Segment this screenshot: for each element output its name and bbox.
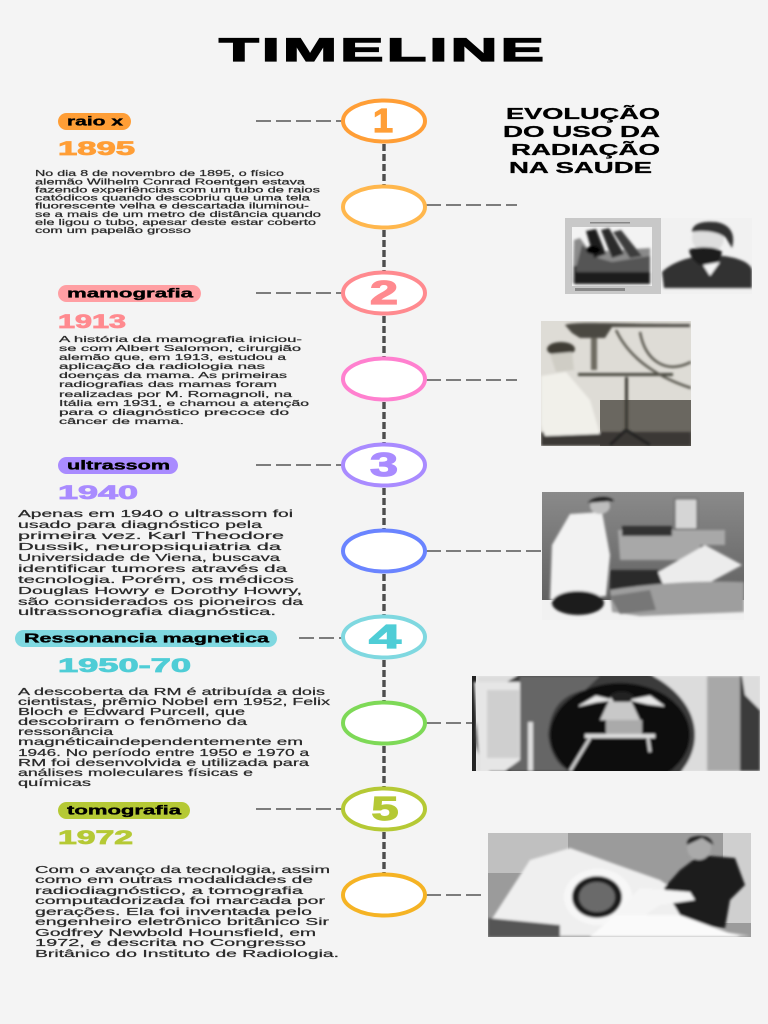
text block 1972: Godfrey Newbold Hounsfield, em <box>35 928 316 939</box>
node 4: 4 <box>369 618 402 655</box>
text block 1940: Douglas Howry e Dorothy Howry, <box>18 586 302 597</box>
text block 1940: Dussik, neuropsiquiatria da <box>18 542 282 553</box>
node 5: 5 <box>372 790 398 827</box>
title: TIMELINE <box>219 32 547 68</box>
text block 1913: doenças da mama. As primeiras <box>59 371 287 380</box>
subtitle: RADIAÇÃO <box>511 139 660 159</box>
text block 1895: se a mais de um metro de distância quando <box>35 210 322 219</box>
node 4 <box>343 616 425 658</box>
text block 1950-70: magnéticaindependentemente em <box>18 737 303 748</box>
node 1: 1 <box>373 102 393 139</box>
photo: early ultrasound <box>542 492 744 620</box>
text block 1950-70: descobriram o fenômeno da <box>18 717 248 728</box>
subtitle: EVOLUÇÃO <box>506 103 660 123</box>
node 1 <box>343 100 425 142</box>
text block 1895: fazendo experiências com um tubo de raios <box>35 186 320 194</box>
pill: ultrassom <box>58 457 178 474</box>
pill: ultrassom: ultrassom <box>67 458 170 472</box>
text block 1950-70: 1946. No período entre 1950 e 1970 a <box>18 748 310 759</box>
text block 1940 <box>18 509 304 618</box>
text block 1950-70: ressonância <box>18 727 114 738</box>
pill: ressonancia magnetica <box>15 630 277 647</box>
text block 1950-70: análises moleculares físicas e <box>18 768 254 779</box>
text block 1950-70: A descoberta da RM é atribuída a dois <box>18 687 325 698</box>
timeline connectors <box>256 121 542 895</box>
year 1940: 1940 <box>58 483 138 504</box>
year 1895: 1895 <box>58 139 136 160</box>
pill: raio x <box>58 113 131 130</box>
photo: early mammography <box>541 321 691 446</box>
node blank 1 <box>343 186 425 228</box>
pill: tomografia <box>58 802 190 819</box>
node blank 2 <box>343 358 425 400</box>
photo: hand x-ray <box>565 218 661 294</box>
text block 1913: A história da mamografia iniciou- <box>59 335 303 344</box>
text block 1895: ele ligou o tubo, apesar deste estar coberto <box>35 218 317 227</box>
text block 1950-70: RM foi desenvolvida e utilizada para <box>18 758 310 769</box>
node 3 <box>343 444 425 486</box>
text block 1972: engenheiro eletrônico britânico Sir <box>35 917 330 928</box>
text block 1940: identificar tumores através da <box>18 564 288 575</box>
subtitle: DO USO DA <box>503 124 661 141</box>
text block 1972: 1972, e descrita no Congresso <box>35 938 307 949</box>
node 5 <box>343 788 425 830</box>
year 1950-70: 1950-70 <box>58 656 191 677</box>
text block 1972: gerações. Ela foi inventada pelo <box>35 907 313 918</box>
text block 1913: aplicação da radiologia nas <box>59 362 265 371</box>
text block 1940: Apenas em 1940 o ultrassom foi <box>18 509 293 520</box>
text block 1913: Itália em 1931, e chamou a atenção <box>59 399 310 408</box>
pill: raio x: raio x <box>67 114 123 128</box>
text block 1972 <box>35 865 339 960</box>
text block 1950-70: químicas <box>18 778 91 789</box>
text block 1940: tecnologia. Porém, os médicos <box>18 575 294 586</box>
text block 1940: Universidade de Viena, buscava <box>18 553 281 564</box>
subtitle <box>503 103 661 177</box>
node 2 <box>343 272 425 314</box>
node 2: 2 <box>370 274 398 311</box>
text block 1972: radiodiagnóstico, a tomografia <box>35 886 304 897</box>
pill: ressonancia magnetica: Ressonancia magnetica <box>24 632 271 646</box>
text block 1913 <box>59 335 310 426</box>
photo: Roentgen portrait <box>661 218 752 294</box>
text block 1913: câncer de mama. <box>59 417 184 426</box>
text block 1895: catódicos quando descobriu que uma tela <box>35 194 311 202</box>
text block 1913: para o diagnóstico precoce do <box>59 408 290 417</box>
text block 1972: Britânico do Instituto de Radiologia. <box>35 949 339 960</box>
text block 1895: No dia 8 de novembro de 1895, o físico <box>35 169 285 178</box>
node blank 5 <box>343 874 425 916</box>
text block 1940: ultrassonografia diagnóstica. <box>18 607 276 618</box>
text block 1913: realizadas por M. Romagnoli, na <box>59 390 293 399</box>
year 1972: 1972 <box>58 828 133 849</box>
text block 1940: são considerados os pioneiros da <box>18 597 304 608</box>
text block 1950-70: Bloch e Edward Purcell, que <box>18 707 246 718</box>
text block 1940: primeira vez. Karl Theodore <box>18 531 285 542</box>
text block 1940: usado para diagnóstico pela <box>18 520 263 531</box>
subtitle: NA SAUDE <box>509 160 653 177</box>
pill: mamografia: mamografia <box>67 286 195 300</box>
pill: mamografia <box>58 285 201 302</box>
text block 1950-70 <box>18 687 330 789</box>
photo: early MRI <box>472 676 760 771</box>
text block 1895 <box>35 169 322 235</box>
node blank 4 <box>343 702 425 744</box>
node blank 3 <box>343 530 425 572</box>
text block 1913: alemão que, em 1913, estudou a <box>59 353 287 362</box>
text block 1913: se com Albert Salomon, cirurgião <box>59 344 302 353</box>
node 3: 3 <box>370 446 398 483</box>
text block 1972: computadorizada foi marcada por <box>35 896 326 907</box>
text block 1972: como em outras modalidades de <box>35 875 314 886</box>
text block 1895: alemão Wilhelm Conrad Roentgen estava <box>35 178 306 186</box>
text block 1895: fluorescente velha e descartada iluminou- <box>35 202 309 210</box>
text block 1972: Com o avanço da tecnologia, assim <box>35 865 330 876</box>
text block 1895: com um papelão grosso <box>35 226 192 235</box>
text block 1913: radiografias das mamas foram <box>59 380 277 389</box>
photo: CT scanner and Hounsfield <box>488 833 751 937</box>
year 1913: 1913 <box>58 312 126 333</box>
text block 1950-70: cientistas, prêmio Nobel em 1952, Felix <box>18 697 330 708</box>
pill: tomografia: tomografia <box>67 804 183 818</box>
